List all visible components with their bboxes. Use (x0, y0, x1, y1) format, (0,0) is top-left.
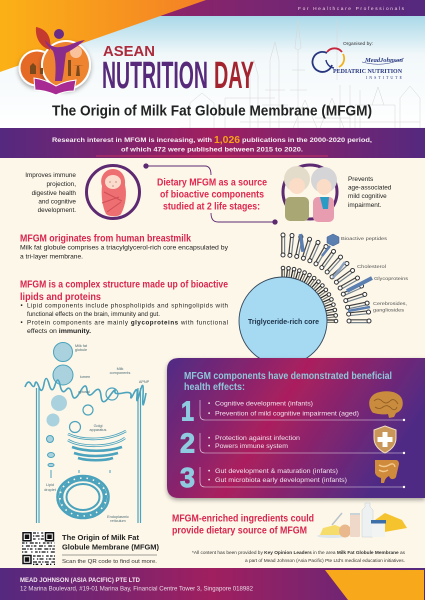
heading: dietary MFGM: Dietary MFGM as a source (157, 176, 267, 188)
item 3: gut: Gut development & maturation (infants) (215, 468, 338, 475)
footer (0, 568, 425, 600)
for healthcare professionals label: For Healthcare Professionals (298, 6, 405, 12)
diagram: mammary cell milk secretion: Lipid (46, 483, 54, 487)
item 1: cognitive: Prevention of mild cognitive impairment (aged) (215, 410, 359, 418)
text: elderly benefits: age-associated (348, 184, 392, 192)
item 1: cognitive: • (208, 410, 210, 418)
QR code (22, 531, 55, 565)
icon: elderly couple (283, 165, 337, 222)
panel: health effects (167, 358, 425, 498)
text: elderly benefits: mild cognitive (348, 193, 387, 200)
diagram: MFGM membrane structure: Triglyceride-rich core (248, 317, 319, 326)
item 3: gut (180, 462, 405, 493)
diagram: mammary cell milk secretion: apparatus (90, 428, 107, 432)
item 2: immunity (180, 428, 405, 458)
diagram: MFGM membrane structure: Cholesterol (357, 264, 386, 270)
item 1: cognitive: • (208, 400, 210, 408)
diagram: mammary cell milk secretion: Golgi (94, 424, 103, 428)
section: MFGM originates (20, 234, 229, 260)
text: infant benefits: digestive health (32, 190, 76, 197)
research interest banner: publications in the 2000-2020 period, (242, 137, 372, 144)
footer: MEAD JOHNSON (ASIA PACIFIC) PTE LTD (20, 578, 141, 584)
section: complex structure (20, 280, 229, 335)
icon: intestine (375, 460, 399, 483)
icon: shield (374, 426, 396, 453)
header banner (0, 0, 425, 128)
research interest banner (0, 128, 425, 158)
section: MFGM originates: MFGM originates from human breastmilk (20, 234, 191, 244)
text: elderly benefits (348, 176, 392, 209)
connector: bottom (211, 213, 277, 224)
heading: MFGM-enriched ingredients: provide dietary source of MFGM (172, 524, 307, 536)
diagram: MFGM membrane structure: Glycoproteins (374, 276, 409, 282)
item 2: immunity: Protection against infection (215, 435, 300, 442)
item 1: cognitive: Cognitive development (infants) (215, 400, 313, 408)
section: MFGM originates: a tri-layer membrane. (20, 254, 83, 260)
heading: dietary MFGM: of bioactive components (160, 188, 264, 200)
text: elderly benefits: impairment. (348, 202, 382, 209)
item 2: immunity: Powers immune system (215, 443, 288, 450)
text: infant benefits (25, 172, 76, 214)
text: infant benefits: projection, (46, 181, 76, 188)
section: complex structure: MFGM is a complex structure made up of bioactive (20, 280, 228, 290)
item 1: cognitive: 1 (181, 396, 194, 426)
diagram: mammary cell milk secretion: droplet (44, 488, 57, 492)
footnote (192, 550, 405, 563)
diagram: mammary cell milk secretion: Endoplasmic (107, 515, 129, 519)
section: complex structure: • (20, 302, 23, 310)
QR caption: Scan the QR code to find out more. (62, 559, 157, 565)
item 3: gut: • (208, 477, 210, 484)
panel heading: MFGM components have demonstrated beneficial (184, 371, 392, 382)
diagram: mammary cell milk secretion: components (110, 371, 130, 375)
QR caption: Globule Membrane (MFGM) (62, 542, 160, 552)
research interest banner: 1,026 (214, 135, 240, 146)
icon: swaddled baby (86, 166, 140, 218)
section: MFGM originates: Milk fat globule comprises a triacylglycerol-rich core encapsulated by (20, 244, 229, 252)
text: infant benefits: and cognitive (38, 198, 76, 206)
text: elderly benefits: Prevents (348, 176, 373, 183)
organiser logo: Mead Johnson Pediatric Nutrition Institute: MeadJohnson (364, 57, 403, 64)
event name wordmark: NUTRITION (102, 55, 208, 97)
illustration: dairy foods (317, 503, 407, 538)
diagram: mammary cell milk secretion: globule (75, 348, 87, 352)
heading: dietary MFGM: studied at 2 life stages: (163, 200, 260, 212)
footer: 12 Marina Boulevard, #19-01 Marina Bay, Financial Centre Tower 3, Singapore 018982 (20, 586, 254, 592)
text: infant benefits: Improves immune (25, 172, 76, 179)
organiser logo: Mead Johnson Pediatric Nutrition Institute: PEDIATRIC NUTRITION (333, 68, 402, 75)
heading: MFGM-enriched ingredients: MFGM-enriched ingredients could (172, 512, 314, 524)
diagram: MFGM membrane structure: Bioactive peptides (341, 236, 388, 242)
item 2: immunity: 2 (180, 428, 195, 458)
section: complex structure: lipids and proteins (20, 292, 101, 303)
section: complex structure: Lipid components include phospholipids and sphingolipids with (27, 302, 229, 310)
footnote: *All content has been provided by Key Opinion Leaders in the area Milk Fat Globule Membrane as (192, 550, 405, 555)
item 1: cognitive (181, 396, 405, 426)
event name wordmark: DAY (214, 55, 254, 97)
section: complex structure: • (20, 320, 23, 326)
logo: ASEAN Nutrition Day emblem (18, 27, 91, 95)
diagram: MFGM membrane structure: Cerebrosides, (373, 301, 407, 307)
connector: top (144, 164, 211, 175)
item 3: gut: Gut microbiota early development (infants) (215, 477, 347, 484)
item 2: immunity: • (208, 443, 210, 450)
section: complex structure: effects on immunity. (27, 328, 91, 335)
diagram: mammary cell milk secretion: Milk (117, 367, 123, 371)
heading: MFGM-enriched ingredients (172, 512, 314, 536)
panel heading (184, 371, 392, 393)
organiser logo: Mead Johnson Pediatric Nutrition Institute: Organised by: (343, 41, 373, 46)
item 3: gut: 3 (180, 462, 195, 493)
diagram: mammary cell milk secretion: lumen (80, 375, 90, 379)
research interest banner: of which 472 were published between 2015 to 2020. (121, 146, 303, 154)
footnote: a part of Mead Johnson (Asia Pacific) Pte Ltd's medical education initiatives. (245, 558, 405, 563)
event name wordmark (102, 44, 254, 97)
organiser logo: Mead Johnson Pediatric Nutrition Institute: INSTITUTE (366, 75, 403, 80)
diagram: MFGM membrane structure: gangliosides (373, 308, 405, 314)
diagram: MFGM membrane structure (239, 233, 409, 365)
diagram: mammary cell milk secretion: Milk fat (75, 344, 88, 348)
diagram: mammary cell milk secretion: APNP (139, 380, 150, 384)
section: complex structure: Protein components are mainly glycoproteins with functional (27, 320, 228, 326)
organiser logo: Mead Johnson Pediatric Nutrition Institute (312, 41, 404, 80)
event name wordmark: ASEAN (103, 44, 155, 60)
QR caption (62, 533, 160, 565)
section: complex structure: functional effects on the brain, immunity and gut. (27, 311, 160, 318)
title: The Origin of Milk Fat Globule Membrane (MFGM) (52, 104, 372, 120)
item 3: gut: • (208, 468, 210, 475)
diagram: mammary cell milk secretion: cytosol (78, 390, 90, 394)
panel heading: health effects: (184, 382, 245, 393)
text: infant benefits: development. (38, 207, 76, 214)
item 2: immunity: • (208, 435, 210, 442)
QR caption: The Origin of Milk Fat (62, 533, 140, 542)
icon: brain (369, 391, 403, 418)
diagram: mammary cell milk secretion (25, 342, 150, 523)
heading: dietary MFGM (157, 176, 267, 212)
research interest banner: Research interest in MFGM is increasing, with (52, 137, 212, 144)
diagram: mammary cell milk secretion: reticulum (110, 519, 126, 523)
